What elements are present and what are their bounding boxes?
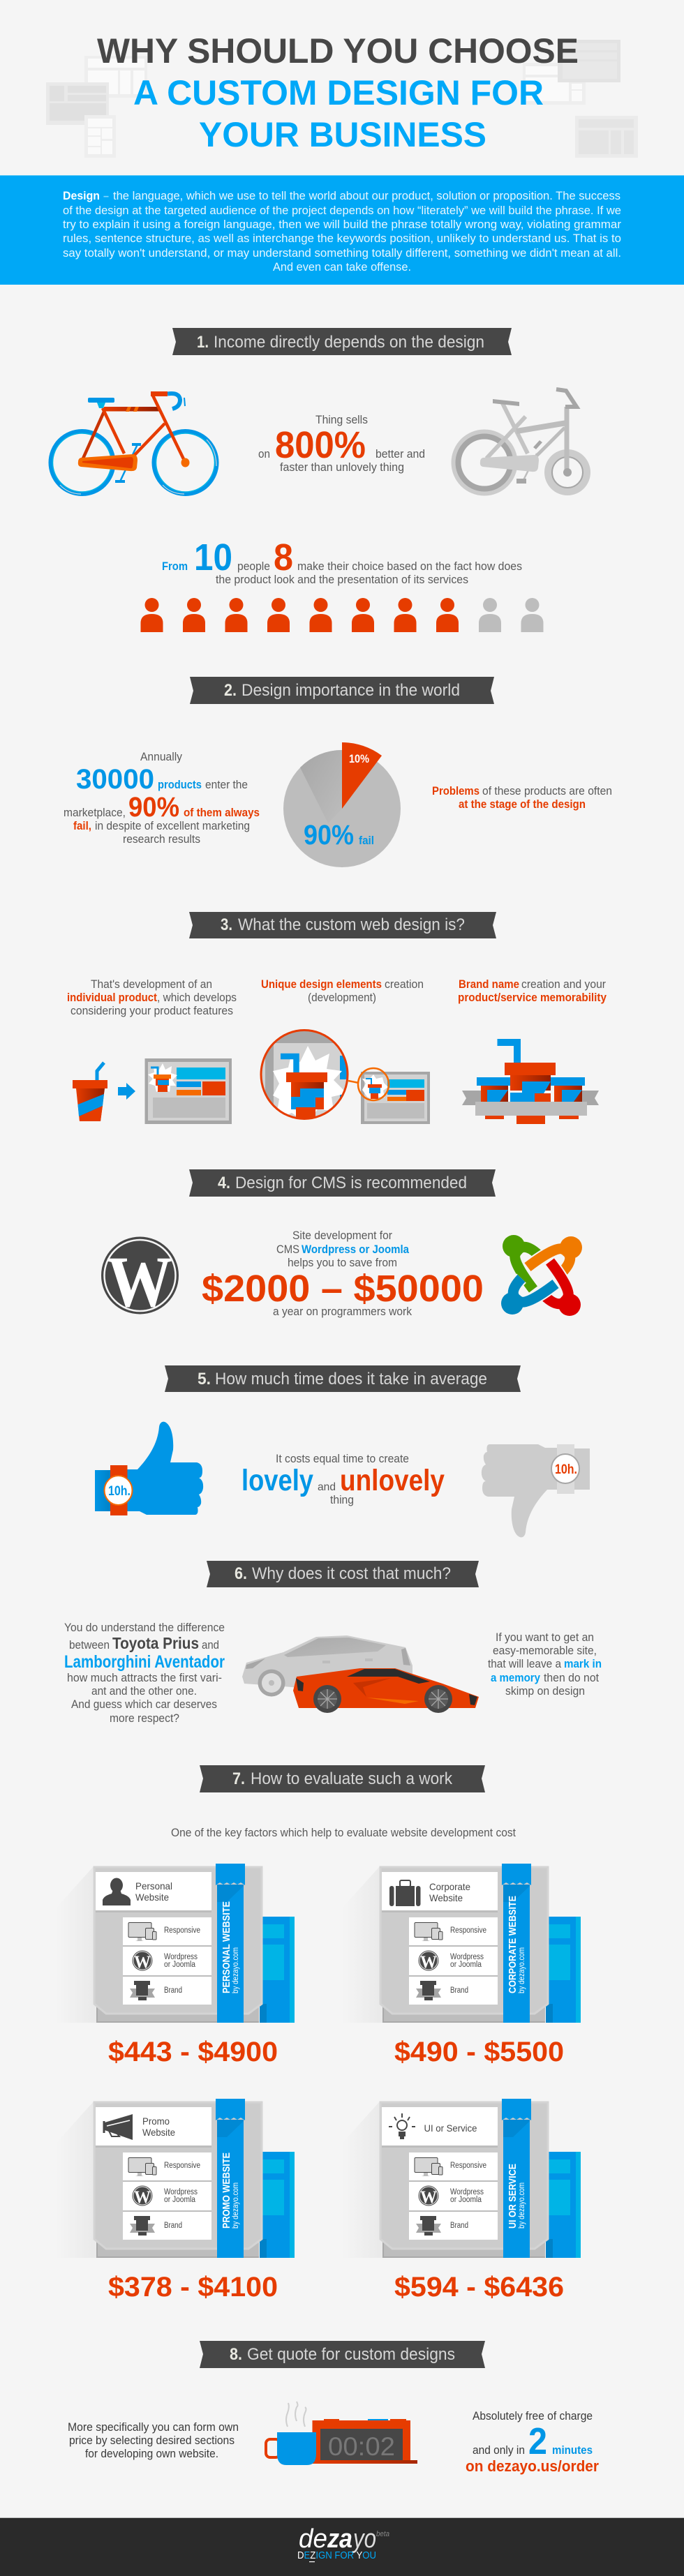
feature list: [420, 2162, 486, 2230]
feature list: Brand: [164, 2222, 182, 2230]
heading 3: 3.: [221, 915, 232, 934]
text: free of charge: and only in: [473, 2443, 525, 2457]
heading 2: 2.: [224, 681, 237, 700]
heading 2: Design importance in the world: [241, 681, 460, 700]
icon: coffee mug and timer clock: [266, 2402, 417, 2465]
text: from 10 people 8: From: [162, 560, 188, 573]
heading 6: [207, 1561, 479, 1587]
feature list: [134, 2162, 200, 2230]
intro panel: –: [103, 189, 109, 202]
card title: Corporate: [429, 1881, 470, 1892]
text: free of charge: 2: [528, 2420, 547, 2462]
text: problems at stage of design: [432, 784, 612, 811]
text: mark in memory: skimp on design: [505, 1684, 585, 1698]
icon: wordpress logo: W: [107, 1242, 172, 1322]
text: CMS savings: Site development for: [292, 1229, 392, 1242]
feature list: Brand: [164, 1986, 182, 1995]
chart: pie 10 vs 90 percent: [283, 742, 401, 867]
feature list: Brand: [450, 1986, 468, 1995]
header wireframe decorations: [46, 40, 638, 158]
text: annual products: Annually: [140, 750, 182, 763]
panel: promo website card: [56, 2099, 295, 2302]
text: free of charge: Absolutely free of charge: [473, 2409, 593, 2423]
text: from 10 people 8: 10: [194, 537, 232, 578]
text: from 10 people 8: [162, 537, 522, 586]
feature list: or Joomla: [164, 2196, 196, 2204]
text: 800 percent stat: on: [258, 447, 270, 460]
text: annual products: of them always: [184, 806, 260, 819]
text: annual products: marketplace,: [64, 806, 126, 819]
panel: corporate website card: [342, 1864, 581, 2067]
text: lovely and unlovely: It costs equal time to create: [276, 1452, 409, 1465]
icon: light bulb: [389, 2113, 415, 2139]
ribbon label: CORPORATE WEBSITE: [507, 1896, 519, 1993]
icon: grey and orange cars: [242, 1635, 479, 1713]
heading 7: How to evaluate such a work: [251, 1769, 453, 1788]
heading 6: 6.: [235, 1564, 247, 1583]
text: 800 percent stat: Thing sells: [315, 413, 368, 426]
text: annual products: in despite of excellent marketing: [95, 819, 250, 832]
ribbon label: UI OR SERVICE: [507, 2164, 519, 2229]
ribbon label: by dezayo.com: [230, 2182, 240, 2229]
panel: personal website card: [56, 1864, 295, 2067]
text: brand name: creation and your: [521, 978, 606, 991]
icon row: ten people: [141, 598, 543, 632]
feature list: Responsive: [450, 1926, 486, 1935]
ribbon label: [221, 1901, 240, 1993]
price: $378 - $4100: [108, 2272, 278, 2302]
text: Toyota vs Lamborghini: You do understand the difference: [64, 1621, 225, 1634]
text: lovely and unlovely: unlovely: [340, 1464, 445, 1497]
heading 8: Get quote for custom designs: [247, 2345, 455, 2364]
price: $443 - $4900: [108, 2037, 278, 2067]
text: lovely and unlovely: lovely: [241, 1464, 313, 1497]
text: Toyota vs Lamborghini: Toyota Prius: [112, 1634, 199, 1652]
title: YOUR BUSINESS: [199, 115, 486, 154]
text: 800 percent stat: better and: [376, 447, 425, 460]
chart: pie 10 vs 90 percent: 90%: [304, 820, 354, 851]
text: individual product: [67, 978, 237, 1017]
logo wordmark: yo: [352, 2524, 376, 2554]
text: unique design elements: [261, 978, 424, 1004]
intro panel: the language, which we use to tell the world about our product, solution or proposition. The success: [113, 189, 620, 202]
intro panel: rules, sentence structure, as well as interchange the keywords position, unlikely to understand us. That is to: [63, 232, 621, 245]
text: unique design elements: (development): [308, 991, 376, 1004]
text: mark in memory: If you want to get an: [496, 1631, 594, 1644]
text: Toyota vs Lamborghini: more respect?: [110, 1712, 179, 1725]
card title: Website: [429, 1892, 463, 1903]
text: form own price: for developing own website.: [85, 2447, 218, 2460]
text: annual products: products: [158, 778, 202, 791]
text: annual products: fail,: [73, 819, 91, 832]
feature list: Wordpress: [164, 1953, 198, 1961]
logo wordmark: beta: [376, 2530, 389, 2538]
text: mark in memory: [488, 1631, 602, 1698]
heading 8: [200, 2341, 485, 2368]
text: free of charge: [466, 2409, 599, 2475]
feature list: W: [134, 2188, 151, 2207]
text: annual products: 90%: [128, 792, 179, 823]
intro panel: [0, 175, 684, 285]
text: CMS savings: $2000 – $50000: [202, 1268, 484, 1310]
heading 4: 4.: [218, 1174, 230, 1192]
text: mark in memory: a memory: [491, 1671, 540, 1684]
text: brand name: [458, 978, 607, 1004]
text: annual products: 30000: [76, 764, 154, 795]
text: annual products: enter the: [205, 778, 248, 791]
text: from 10 people 8: make their choice based on the fact how does: [297, 560, 522, 573]
text: problems at stage of design: Problems: [432, 784, 479, 797]
text: 800 percent stat: faster than unlovely thing: [280, 460, 404, 474]
text: annual products: research results: [123, 832, 200, 846]
intro panel: And even can take offense.: [273, 260, 411, 274]
text: Toyota vs Lamborghini: how much attracts the first vari-: [67, 1671, 222, 1684]
heading 1: 1.: [197, 333, 209, 352]
text: individual product: individual product: [67, 991, 157, 1004]
chart: pie 10 vs 90 percent: fail: [359, 834, 374, 847]
feature list: or Joomla: [450, 2196, 482, 2204]
icon: coffee mug and timer clock: 00:02: [328, 2432, 395, 2461]
text: mark in memory: then do not: [544, 1671, 599, 1684]
heading 7: 7.: [232, 1769, 245, 1788]
card title: Website: [135, 1892, 169, 1903]
card title: [135, 1880, 172, 1903]
ribbon label: by dezayo.com: [230, 1947, 240, 1993]
icon: brand cups on ribbon: [462, 1039, 599, 1124]
text: CMS savings: helps you to save from: [288, 1256, 397, 1269]
heading 8: 8.: [230, 2345, 242, 2364]
intro panel: try to explain it using a foreign language, then we will build the phrase totally wrong way, violating grammar: [63, 218, 621, 231]
icon: blue thumbs up with watch: 10h.: [108, 1484, 131, 1499]
icon: joomla logo: [501, 1235, 582, 1316]
heading 1: [172, 328, 512, 355]
ribbon label: by dezayo.com: [516, 2182, 526, 2229]
heading 4: Design for CMS is recommended: [235, 1174, 467, 1192]
ribbon label: by dezayo.com: [516, 1947, 526, 1993]
text: mark in memory: easy-memorable site,: [493, 1644, 597, 1657]
text: problems at stage of design: of these products are often: [482, 784, 612, 797]
title: WHY SHOULD YOU CHOOSE: [97, 31, 579, 70]
text: mark in memory: that will leave a: [488, 1657, 561, 1670]
logo wordmark: [299, 2524, 389, 2554]
feature list: or Joomla: [450, 1961, 482, 1969]
feature list: or Joomla: [164, 1961, 196, 1969]
text: form own price: More specifically you can form own: [68, 2420, 239, 2434]
feature list: Wordpress: [450, 1953, 484, 1961]
feature list: Brand: [450, 2222, 468, 2230]
feature list: Wordpress: [164, 2188, 198, 2196]
heading 5: 5.: [198, 1370, 211, 1388]
intro panel: say totally won't understand, or may understand something totally different, something we didn't mean at all.: [63, 246, 621, 260]
price: $490 - $5500: [394, 2037, 564, 2067]
icon: blue thumbs up with watch: [95, 1422, 203, 1515]
icon: magnifier detail over mockup: [258, 1026, 430, 1124]
card title: [142, 2116, 175, 2138]
text: individual product: That's development of an: [91, 978, 212, 991]
heading 5: How much time does it take in average: [215, 1370, 487, 1388]
feature list: Wordpress: [450, 2188, 484, 2196]
intro panel: Design: [63, 189, 100, 202]
text: form own price: [68, 2420, 239, 2460]
icon: grey thumbs down with watch: [482, 1444, 590, 1537]
heading 7: [200, 1765, 485, 1792]
icon: grey thumbs down with watch: 10h.: [555, 1462, 577, 1477]
text: problems at stage of design: at the stage of the design: [459, 797, 586, 811]
feature list: Responsive: [450, 2162, 486, 2170]
text: CMS savings: CMS: [276, 1243, 299, 1256]
price: $594 - $6436: [394, 2272, 564, 2302]
text: 800 percent stat: [258, 413, 425, 474]
ribbon label: [221, 2152, 240, 2229]
icon: unlovely grey bicycle: [451, 389, 590, 495]
text: free of charge: minutes: [552, 2443, 593, 2457]
text: lovely and unlovely: and: [318, 1481, 336, 1493]
text: mark in memory: mark in: [564, 1657, 602, 1670]
card title: [429, 1881, 470, 1903]
text: lovely and unlovely: thing: [330, 1493, 354, 1506]
card title: Personal: [135, 1880, 172, 1892]
feature list: W: [134, 1953, 151, 1972]
title: [97, 31, 579, 154]
text: Toyota vs Lamborghini: between: [69, 1638, 110, 1652]
feature list: Responsive: [164, 2162, 200, 2170]
icon: person: [103, 1878, 131, 1905]
text: annual products: [64, 750, 260, 846]
icon: lovely blue bicycle: [50, 391, 216, 494]
text: free of charge: on dezayo.us/order: [466, 2457, 599, 2475]
feature list: W: [420, 2188, 437, 2207]
title: A CUSTOM DESIGN FOR: [133, 73, 544, 112]
ribbon label: [507, 2164, 526, 2229]
ribbon label: PROMO WEBSITE: [221, 2152, 232, 2229]
icon: megaphone: [103, 2114, 133, 2140]
logo tagline: DEZIGN FOR YOU: [297, 2549, 376, 2561]
text: key factors intro: One of the key factors which help to evaluate website development cost: [171, 1826, 516, 1839]
intro panel: of the design at the targeted audience of the project depends on how “literately” we will build the phrase. If we: [63, 204, 621, 217]
icon: website mockup with cup: [145, 1058, 232, 1124]
heading 3: What the custom web design is?: [238, 915, 465, 934]
text: from 10 people 8: 8: [274, 537, 293, 578]
card title: Promo: [142, 2116, 170, 2127]
text: CMS savings: a year on programmers work: [273, 1305, 412, 1318]
text: Toyota vs Lamborghini: and: [202, 1638, 219, 1652]
heading 3: [189, 912, 496, 938]
text: individual product: considering your product features: [70, 1004, 233, 1017]
heading 2: [190, 677, 494, 704]
text: from 10 people 8: the product look and the presentation of its services: [216, 573, 468, 586]
heading 5: [165, 1365, 521, 1392]
text: unique design elements: Unique design elements: [261, 978, 382, 991]
panel: footer with logo: [0, 2517, 684, 2576]
text: Toyota vs Lamborghini: And guess which car deserves: [71, 1698, 217, 1711]
panel: UI or service card: [342, 2099, 581, 2302]
ribbon label: [507, 1896, 526, 1993]
text: CMS savings: [202, 1229, 484, 1318]
chart: pie 10 vs 90 percent: 10%: [349, 752, 369, 765]
text: lovely and unlovely: [241, 1452, 445, 1506]
ribbon label: PERSONAL WEBSITE: [221, 1901, 232, 1993]
text: brand name: product/service memorability: [458, 991, 607, 1004]
feature list: [420, 1926, 486, 1995]
card title: UI or Service: [424, 2122, 477, 2134]
text: Toyota vs Lamborghini: Lamborghini Aventador: [64, 1652, 225, 1672]
feature list: Responsive: [164, 1926, 200, 1935]
heading 4: [189, 1169, 496, 1197]
heading 1: Income directly depends on the design: [214, 333, 484, 352]
text: unique design elements: creation: [385, 978, 424, 991]
text: CMS savings: Wordpress or Joomla: [302, 1243, 409, 1256]
logo wordmark: za: [327, 2524, 352, 2554]
text: form own price: price by selecting desired sections: [69, 2434, 235, 2447]
feature list: W: [420, 1953, 437, 1972]
text: from 10 people 8: people: [237, 560, 270, 573]
feature list: [134, 1926, 200, 1995]
logo wordmark: de: [299, 2524, 327, 2554]
icon: drink cup: [73, 1063, 107, 1121]
icon: briefcase: [389, 1880, 420, 1906]
heading 6: Why does it cost that much?: [252, 1564, 451, 1583]
text: Toyota vs Lamborghini: ant and the other one.: [91, 1684, 197, 1698]
text: Toyota vs Lamborghini: [64, 1621, 225, 1725]
text: individual product: , which develops: [157, 991, 237, 1004]
text: 800 percent stat: 800%: [275, 424, 366, 466]
card title: Website: [142, 2127, 175, 2138]
text: brand name: Brand name: [459, 978, 519, 991]
arrow: [118, 1083, 135, 1100]
